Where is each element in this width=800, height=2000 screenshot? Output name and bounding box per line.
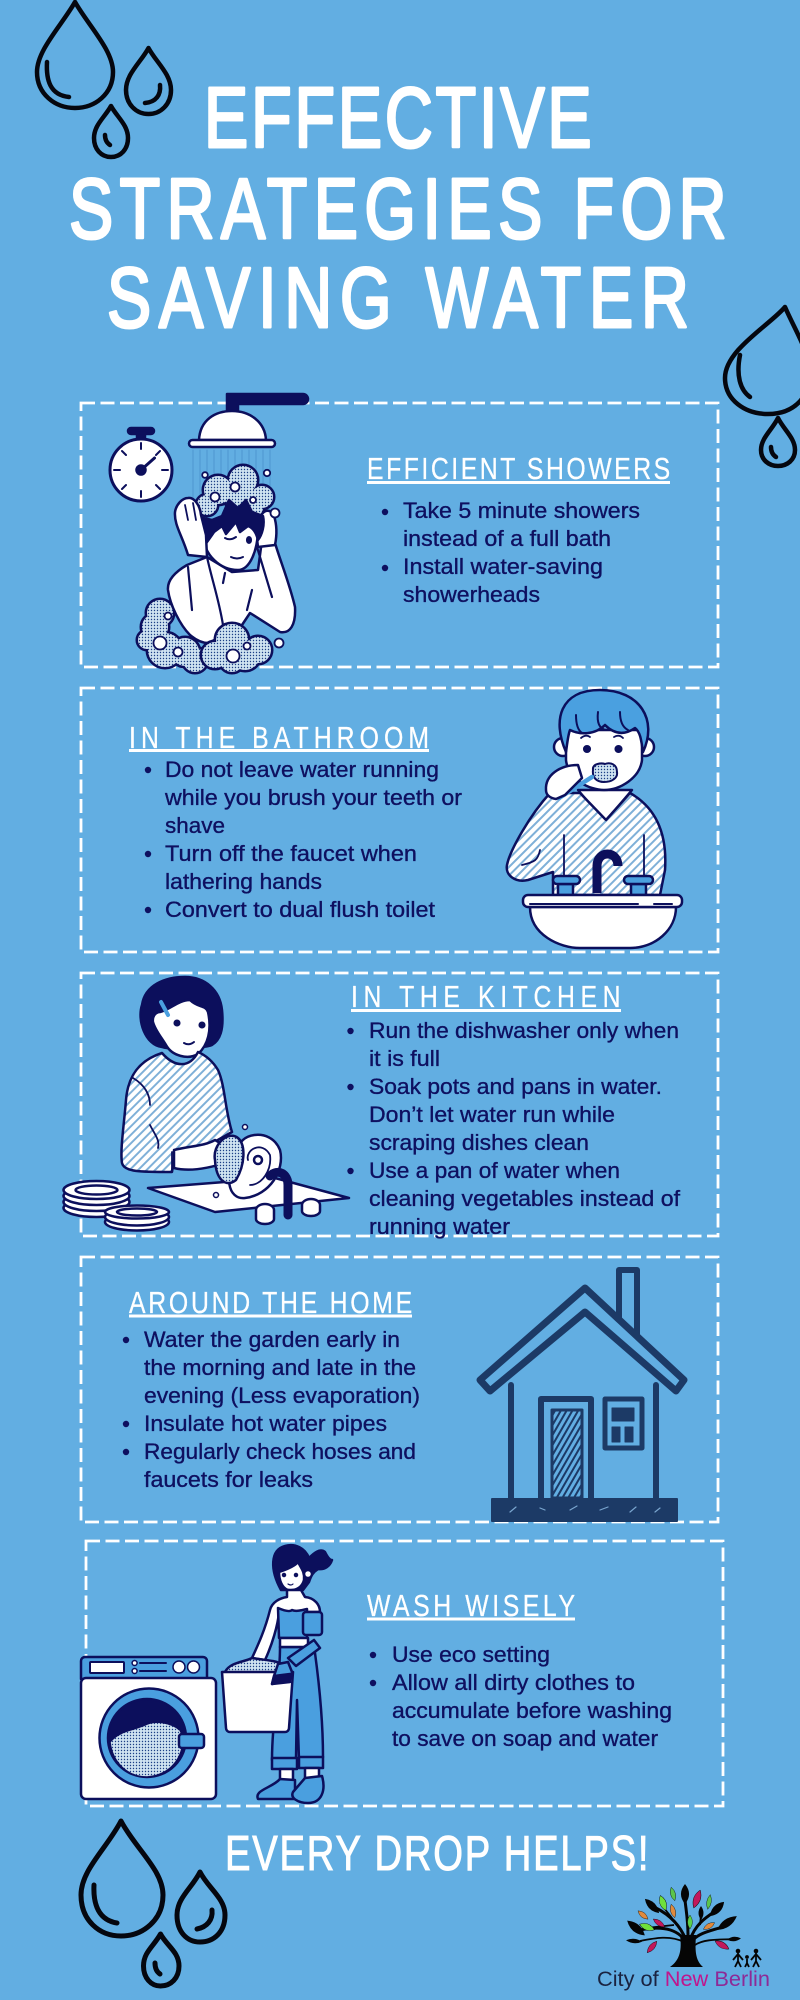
bullet list: kitchen: Soak pots and pans in water. (369, 1074, 662, 1099)
bullet list: home: Insulate hot water pipes (144, 1411, 387, 1436)
illustration: house (480, 1270, 684, 1521)
bullet list: laundry (370, 1642, 672, 1751)
title: SAVING WATER (107, 251, 689, 346)
panel: efficient showers (81, 394, 718, 672)
bullet list: bathroom: Turn off the faucet when (165, 841, 417, 866)
icon: water drops right (725, 307, 800, 466)
bullet list: kitchen (347, 1018, 681, 1239)
icon: family (733, 1949, 761, 1967)
foam in front of body (202, 624, 271, 672)
bullet list: showers: showerheads (403, 582, 540, 607)
icon: water drops bottom left (81, 1821, 225, 1986)
bullet list: kitchen: Use a pan of water when (369, 1158, 620, 1183)
icon: water drops top left (37, 2, 171, 157)
heading: in the kitchen: IN THE KITCHEN (351, 979, 621, 1014)
bullet list: home: Regularly check hoses and (144, 1439, 416, 1464)
bullet list: kitchen: cleaning vegetables instead of (369, 1186, 681, 1211)
icon: stopwatch (110, 428, 172, 501)
bullet list: laundry: Use eco setting (392, 1642, 550, 1667)
closing message: EVERY DROP HELPS! (225, 1827, 649, 1881)
panel: wash wisely (81, 1541, 723, 1806)
logo: City of New Berlin (597, 1884, 770, 1991)
bullet list: bathroom: lathering hands (165, 869, 322, 894)
bullet list: bathroom: Convert to dual flush toilet (165, 897, 435, 922)
bullet list: showers: instead of a full bath (403, 526, 611, 551)
bullet list: kitchen: Don’t let water run while (369, 1102, 615, 1127)
bullet list: home: faucets for leaks (144, 1467, 313, 1492)
title: EFFECTIVE (204, 71, 592, 166)
title: STRATEGIES FOR (69, 162, 727, 257)
bullet list: showers (382, 498, 640, 607)
title (69, 71, 727, 346)
panel: in the bathroom (81, 688, 718, 952)
bullet list: laundry: accumulate before washing (392, 1698, 672, 1723)
illustration: person showering (138, 394, 308, 672)
heading: around the home: AROUND THE HOME (129, 1285, 412, 1320)
logo text: City of New Berlin (597, 1968, 770, 1991)
heading: efficient showers: EFFICIENT SHOWERS (367, 451, 670, 486)
illustration: washing machine (81, 1657, 216, 1799)
bullet list: home (123, 1327, 420, 1492)
bullet list: kitchen: scraping dishes clean (369, 1130, 589, 1155)
bullet list: kitchen: running water (369, 1214, 510, 1239)
icon: tree (625, 1884, 741, 1967)
bullet list: laundry: Allow all dirty clothes to (392, 1670, 635, 1695)
bullet list: laundry: to save on soap and water (392, 1726, 658, 1751)
heading: in the bathroom: IN THE BATHROOM (129, 720, 429, 755)
bullet list: home: the morning and late in the (144, 1355, 416, 1380)
bullet list: bathroom: shave (165, 813, 225, 838)
bullet list: kitchen: Run the dishwasher only when (369, 1018, 679, 1043)
panel: around the home (81, 1257, 718, 1522)
bullet list: home: Water the garden early in (144, 1327, 400, 1352)
panel: in the kitchen (64, 973, 718, 1239)
bullet list: bathroom (145, 757, 462, 922)
illustration: woman washing dishes (121, 977, 349, 1224)
bullet list: kitchen: it is full (369, 1046, 440, 1071)
foam behind body (138, 600, 207, 672)
bullet list: showers: Take 5 minute showers (403, 498, 640, 523)
bullet list: bathroom: while you brush your teeth or (164, 785, 462, 810)
illustration: stacked plates (64, 1181, 169, 1230)
heading: wash wisely: WASH WISELY (367, 1588, 575, 1623)
bullet list: bathroom: Do not leave water running (165, 757, 439, 782)
illustration: woman with laundry basket (222, 1545, 332, 1803)
bullet list: home: evening (Less evaporation) (144, 1383, 420, 1408)
illustration: boy brushing teeth at sink (507, 690, 682, 948)
bullet list: showers: Install water-saving (403, 554, 603, 579)
